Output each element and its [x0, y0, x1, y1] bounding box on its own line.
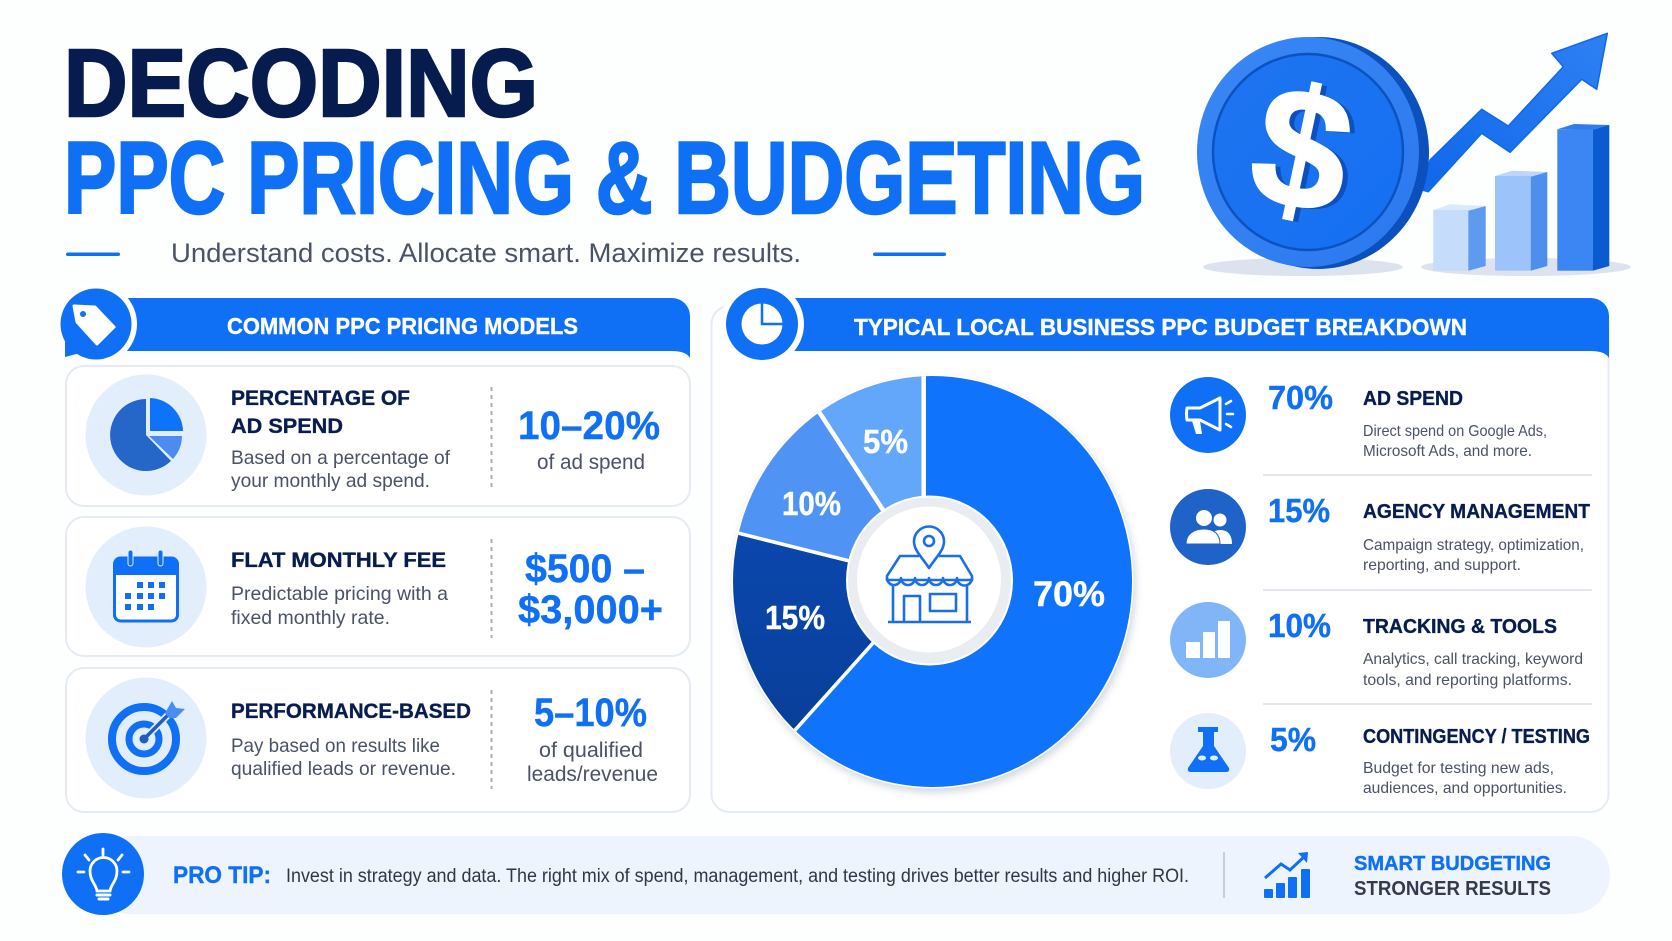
chart: donut — [730, 376, 1138, 796]
title: PPC PRICING & BUDGETING — [64, 121, 1145, 235]
panel: percentage of ad spend: Based on a percentage of — [231, 447, 451, 469]
panel: pricing models header: COMMON PPC PRICING MODELS — [227, 313, 578, 339]
icon: flask — [1170, 713, 1246, 789]
panel: performance-based: 5–10% — [534, 691, 647, 735]
panel: flat monthly fee — [66, 517, 690, 656]
panel: performance-based: of qualified — [539, 738, 643, 762]
row: agency management: Campaign strategy, optimization, — [1363, 537, 1584, 554]
icon: price tag — [74, 306, 114, 344]
row: tracking and tools: tools, and reporting platforms. — [1363, 672, 1572, 689]
row: ad spend: AD SPEND — [1363, 387, 1463, 410]
row: ad spend: Microsoft Ads, and more. — [1363, 443, 1532, 460]
icon: light bulb — [62, 833, 144, 915]
panel: flat monthly fee: fixed monthly rate. — [231, 607, 390, 629]
row: contingency and testing: 5% — [1270, 721, 1316, 758]
panel: performance-based — [66, 668, 690, 812]
panel: flat monthly fee: FLAT MONTHLY FEE — [231, 549, 446, 572]
row: contingency and testing: Budget for testing new ads, — [1363, 760, 1554, 777]
panel: percentage of ad spend: AD SPEND — [231, 415, 343, 438]
icon: calendar — [86, 526, 206, 648]
row: agency management: 15% — [1268, 492, 1330, 529]
callout: pro tip — [62, 833, 1610, 915]
callout: pro tip: SMART BUDGETING — [1354, 852, 1551, 875]
row: tracking and tools — [1170, 602, 1583, 689]
icon: storefront with pin — [887, 526, 972, 622]
icon: coin with rising arrow and bars: $ — [1242, 49, 1374, 255]
panel: percentage of ad spend: your monthly ad spend. — [231, 470, 430, 492]
title: DECODING — [64, 30, 538, 137]
panel: flat monthly fee: $3,000+ — [518, 588, 663, 632]
chart: donut: 70% — [1033, 575, 1105, 614]
row: agency management — [1170, 489, 1590, 574]
panel: flat monthly fee: $500 – — [525, 547, 645, 591]
row: contingency and testing: audiences, and opportunities. — [1363, 780, 1567, 797]
icon: people — [1170, 489, 1246, 565]
panel: percentage of ad spend: PERCENTAGE OF — [231, 387, 410, 410]
chart: donut: 15% — [765, 599, 825, 636]
icon: growth chart — [1264, 852, 1310, 898]
icon: pie chart — [86, 374, 206, 496]
panel: percentage of ad spend — [66, 366, 690, 506]
row: ad spend: 70% — [1268, 379, 1333, 416]
title — [64, 30, 1145, 235]
callout: pro tip: Invest in strategy and data. The right mix of spend, management, and testing drives better results and higher ROI. — [286, 866, 1189, 887]
chart: donut: 5% — [863, 423, 908, 460]
panel: percentage of ad spend: 10–20% — [518, 404, 660, 448]
icon: coin with rising arrow and bars: $ — [1236, 47, 1368, 253]
panel: pricing models header — [55, 283, 690, 365]
row: ad spend: Direct spend on Google Ads, — [1363, 423, 1547, 440]
row: contingency and testing: CONTINGENCY / TESTING — [1363, 725, 1590, 748]
panel: performance-based: Pay based on results like — [231, 735, 440, 757]
panel: performance-based: leads/revenue — [527, 762, 658, 786]
panel: percentage of ad spend: of ad spend — [537, 450, 645, 474]
icon: coin with rising arrow and bars — [1197, 33, 1631, 276]
panel: performance-based: qualified leads or revenue. — [231, 758, 456, 780]
row: agency management: reporting, and support. — [1363, 557, 1521, 574]
row: tracking and tools: TRACKING & TOOLS — [1363, 615, 1557, 638]
header: budget breakdown — [720, 282, 1609, 366]
panel: flat monthly fee: Predictable pricing with a — [231, 583, 448, 605]
chart: donut: 10% — [782, 485, 841, 522]
icon: target with arrow — [86, 678, 206, 798]
row: ad spend — [1170, 377, 1547, 460]
row: agency management: AGENCY MANAGEMENT — [1363, 500, 1590, 523]
callout: pro tip: PRO TIP: — [173, 862, 271, 889]
row: contingency and testing — [1170, 713, 1590, 797]
row: tracking and tools: 10% — [1268, 607, 1331, 644]
icon: megaphone — [1170, 377, 1246, 453]
header: budget breakdown: TYPICAL LOCAL BUSINESS PPC BUDGET BREAKDOWN — [854, 314, 1467, 340]
row: tracking and tools: Analytics, call tracking, keyword — [1363, 651, 1583, 668]
icon: bar chart — [1170, 602, 1246, 678]
panel: performance-based: PERFORMANCE-BASED — [231, 700, 471, 723]
callout: pro tip: STRONGER RESULTS — [1354, 877, 1551, 900]
subtitle: Understand costs. Allocate smart. Maximize results. — [171, 238, 801, 268]
panel: budget breakdown — [712, 282, 1609, 812]
